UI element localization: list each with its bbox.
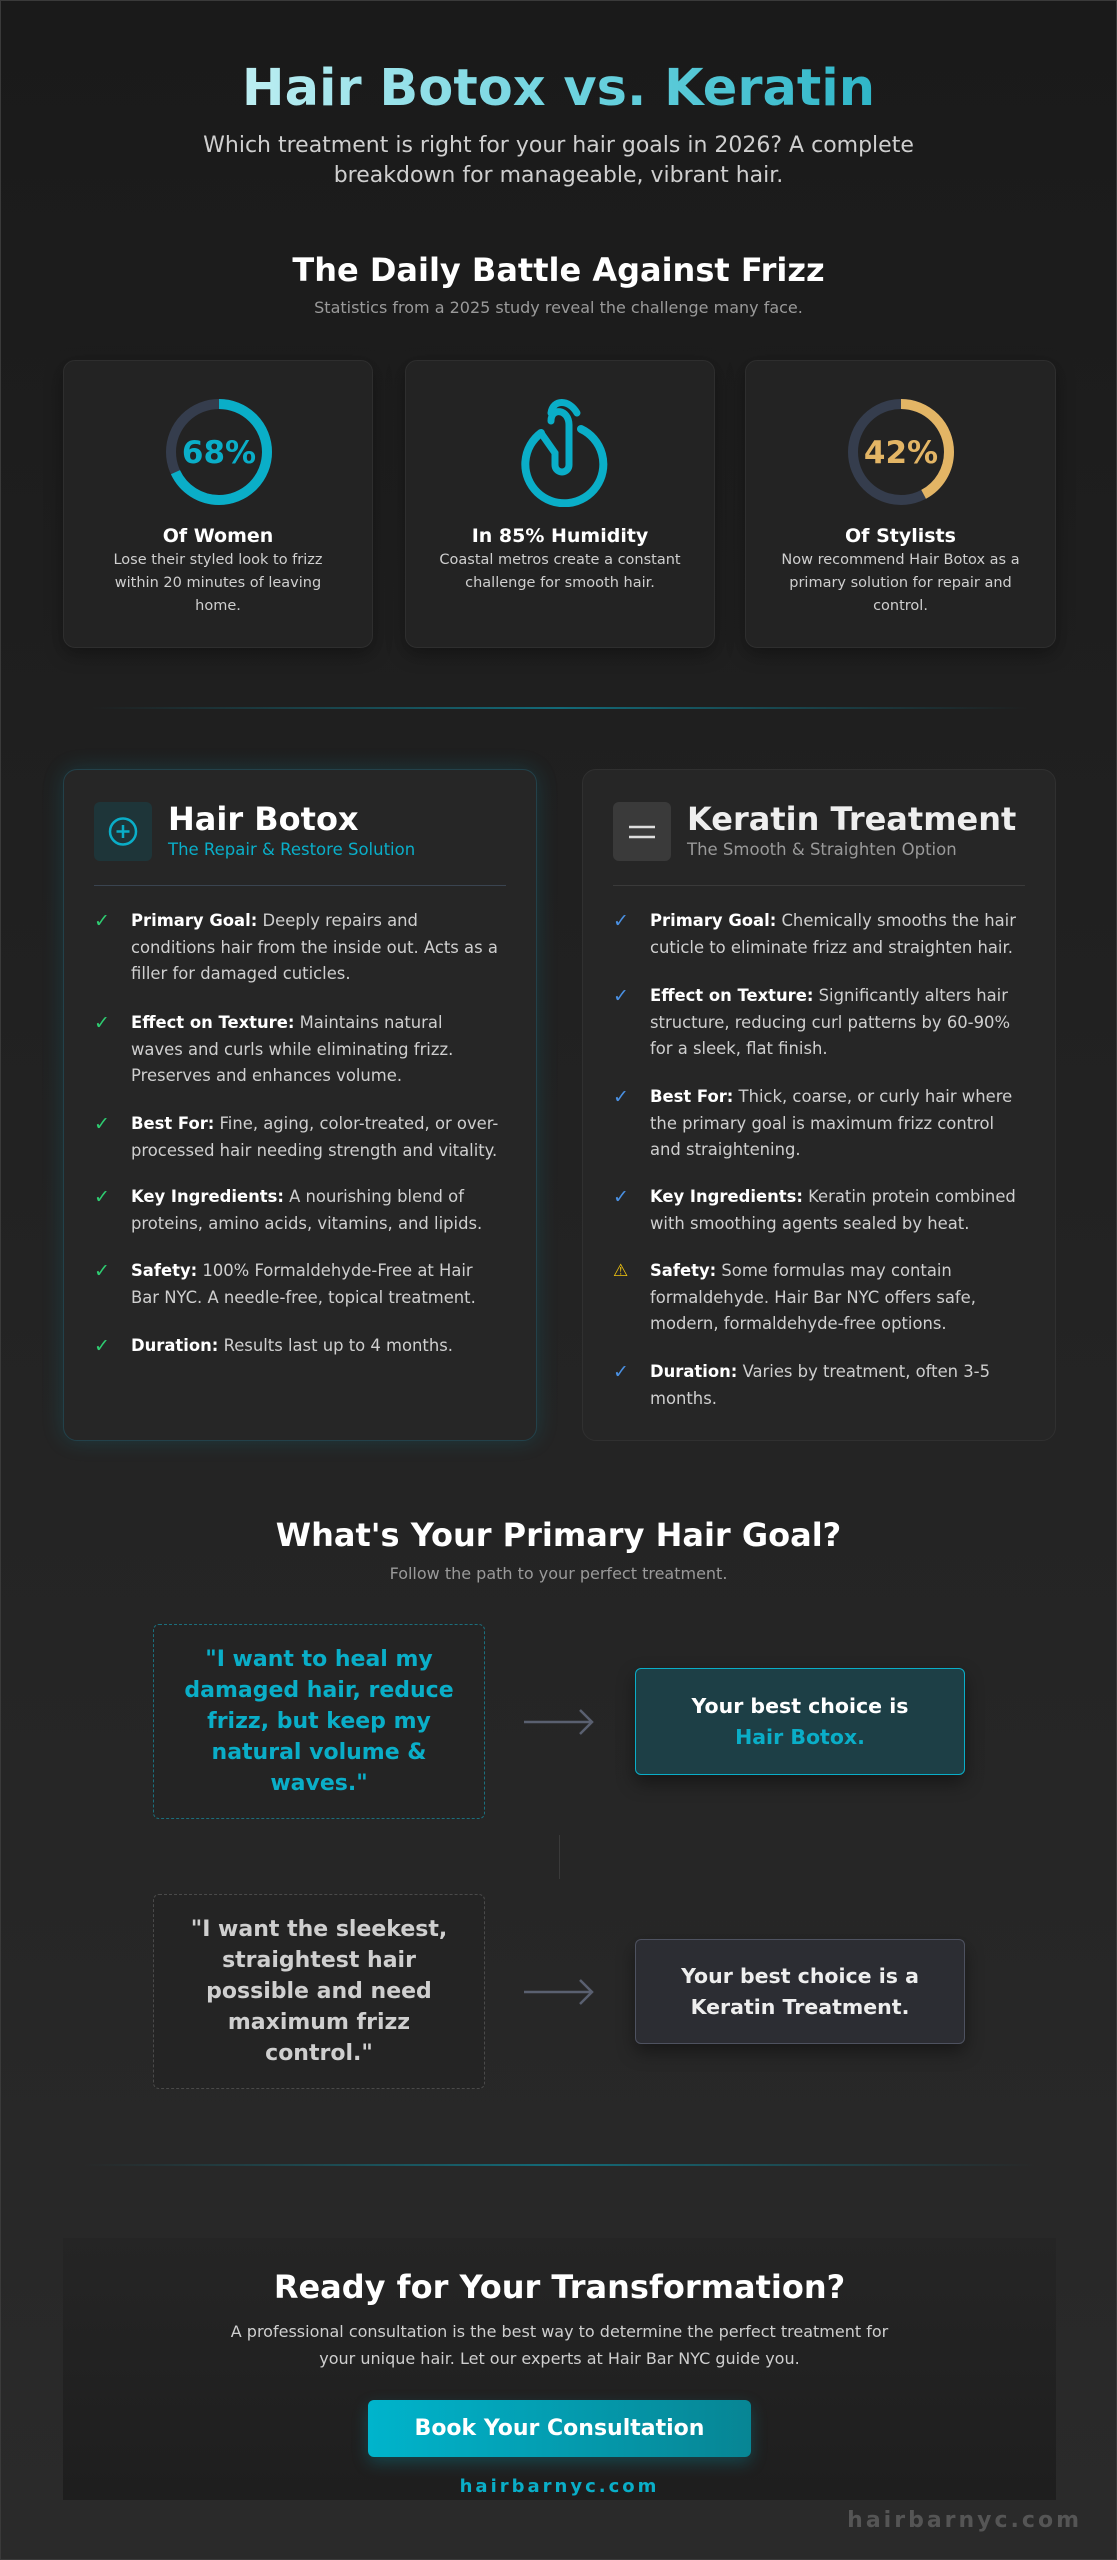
panel: hair botox: ✓ [94, 1113, 110, 1135]
heading: Keratin Treatment [687, 800, 1016, 838]
button: Book Your Consultation [415, 2416, 704, 2441]
panel: keratin: ✓ [613, 910, 629, 932]
panel: keratin: Safety: Some formulas may contain [650, 1261, 952, 1280]
heading: hair goal: What's Your Primary Hair Goal? [276, 1516, 841, 1554]
question: sleek [153, 1894, 485, 2089]
panel: keratin: for a sleek, flat finish. [650, 1039, 828, 1058]
panel: hair botox: filler for damaged cuticles. [131, 964, 351, 983]
panel: keratin: the primary goal is maximum frizz control [650, 1114, 994, 1132]
panel: hair botox: Preserves and enhances volume. [131, 1066, 402, 1085]
arrow 1 [524, 1709, 594, 1735]
icon: 68% ring [166, 399, 272, 505]
panel: hair botox: conditions hair from the inside out. Acts as a [131, 938, 498, 956]
subheading: statistics: Statistics from a 2025 study reveal the challenge many face. [314, 298, 803, 317]
question: sleek: "I want the sleekest, straightest hair possible and need maximum frizz control." [191, 1917, 447, 2066]
panel: hair botox [63, 769, 537, 1441]
panel: keratin: ✓ [613, 1086, 629, 1108]
panel: keratin: cuticle to eliminate frizz and straighten hair. [650, 938, 1013, 956]
panel: keratin: Duration: Varies by treatment, often 3-5 [650, 1362, 990, 1381]
stat card: humidity [405, 360, 715, 648]
panel: keratin: with smoothing agents sealed by heat. [650, 1214, 969, 1232]
stat card: humidity: Coastal metros create a constant challenge for smooth hair. [439, 552, 681, 591]
panel: keratin: ✓ [613, 985, 629, 1007]
stat card: 68%: Lose their styled look to frizz within 20 minutes of leaving home. [113, 552, 323, 614]
panel: keratin: ✓ [613, 1186, 629, 1208]
panel: hair botox: ✓ [94, 1260, 110, 1282]
stat card: 68%: Of Women [163, 525, 273, 547]
panel: hair botox: Primary Goal: Deeply repairs and [131, 911, 418, 930]
heading: daily battle: The Daily Battle Against Frizz [292, 251, 825, 289]
panel: keratin: formaldehyde. Hair Bar NYC offers safe, [650, 1288, 976, 1306]
panel: hair botox: ✓ [94, 1186, 110, 1208]
icon: 68% ring: 68% [182, 435, 256, 471]
panel: hair botox: Safety: 100% Formaldehyde-Free at Hair [131, 1261, 473, 1280]
stat card: 42%: Now recommend Hair Botox as a primary solution for repair and control. [781, 552, 1020, 614]
panel: hair botox: ✓ [94, 1012, 110, 1034]
button [368, 2400, 751, 2457]
panel: CTA [63, 2238, 1056, 2500]
panel: hair botox: processed hair needing strength and vitality. [131, 1140, 497, 1160]
answer: botox [635, 1668, 965, 1775]
stat card: 42%: Of Stylists [845, 525, 956, 547]
subheading: The Repair & Restore Solution [168, 840, 415, 859]
icon: humidity curl [521, 399, 608, 507]
panel: hair botox: Best For: Fine, aging, color-treated, or over- [131, 1114, 498, 1133]
panel: keratin: ⚠ [613, 1261, 628, 1281]
title: Hair Botox vs. Keratin [242, 59, 875, 118]
panel: hair botox: proteins, amino acids, vitamins, and lipids. [131, 1214, 482, 1232]
question: heal: "I want to heal my damaged hair, reduce frizz, but keep my natural volume & waves." [184, 1647, 454, 1796]
question: heal [153, 1624, 485, 1819]
panel: keratin: Effect on Texture: Significantly alters hair [650, 986, 1008, 1005]
subheading: follow path: Follow the path to your perfect treatment. [390, 1564, 727, 1583]
item list [94, 910, 498, 1357]
panel: keratin: modern, formaldehyde-free options. [650, 1314, 947, 1333]
answer: keratin: Keratin Treatment. [691, 1995, 909, 2019]
panel: keratin: Best For: Thick, coarse, or curly hair where [650, 1087, 1012, 1106]
subtitle: Which treatment is right for your hair goals in 2026? A complete breakdown for manageable, vibrant hair. [203, 133, 914, 188]
panel: keratin: months. [650, 1388, 717, 1408]
watermark: hairbarnyc.com [847, 2508, 1082, 2533]
icon: lines [613, 802, 671, 861]
answer: botox: Hair Botox. [735, 1725, 865, 1749]
panel: hair botox: Bar NYC. A needle-free, topical treatment. [131, 1288, 476, 1306]
stat card: 68% [63, 360, 373, 648]
panel: hair botox: Duration: Results last up to 4 months. [131, 1336, 453, 1355]
icon: 42% ring [848, 399, 954, 505]
item list [613, 910, 1016, 1408]
subheading: The Smooth & Straighten Option [687, 840, 957, 859]
panel: hair botox: ✓ [94, 1335, 110, 1357]
panel: keratin: and straightening. [650, 1140, 801, 1159]
heading: Hair Botox [168, 800, 359, 838]
panel: hair botox: ✓ [94, 910, 110, 932]
stat card: 42% [745, 360, 1056, 648]
CTA text: A professional consultation is the best way to determine the perfect treatment for your unique hair. Let our experts at Hair Bar NYC guide you. [231, 2322, 888, 2368]
icon: 42% ring: 42% [864, 435, 938, 471]
panel: keratin: Primary Goal: Chemically smooths the hair [650, 911, 1016, 930]
url: hairbarnyc.com [460, 2476, 659, 2497]
panel: keratin: structure, reducing curl patterns by 60-90% [650, 1012, 1010, 1032]
panel: keratin: ✓ [613, 1361, 629, 1383]
panel: hair botox: Key Ingredients: A nourishing blend of [131, 1187, 464, 1206]
answer: keratin: Your best choice is a [681, 1964, 919, 1988]
stat card: humidity: In 85% Humidity [472, 525, 648, 547]
panel: hair botox: Effect on Texture: Maintains natural [131, 1013, 443, 1032]
panel: keratin [582, 769, 1056, 1441]
CTA heading: Ready for Your Transformation? [274, 2268, 845, 2306]
arrow 2 [524, 1979, 594, 2005]
answer: botox: Your best choice is [692, 1694, 908, 1718]
panel: keratin: Key Ingredients: Keratin protein combined [650, 1187, 1016, 1206]
icon: plus circle [94, 802, 152, 861]
answer: keratin [635, 1939, 965, 2044]
panel: hair botox: waves and curls while eliminating frizz. [131, 1040, 453, 1058]
